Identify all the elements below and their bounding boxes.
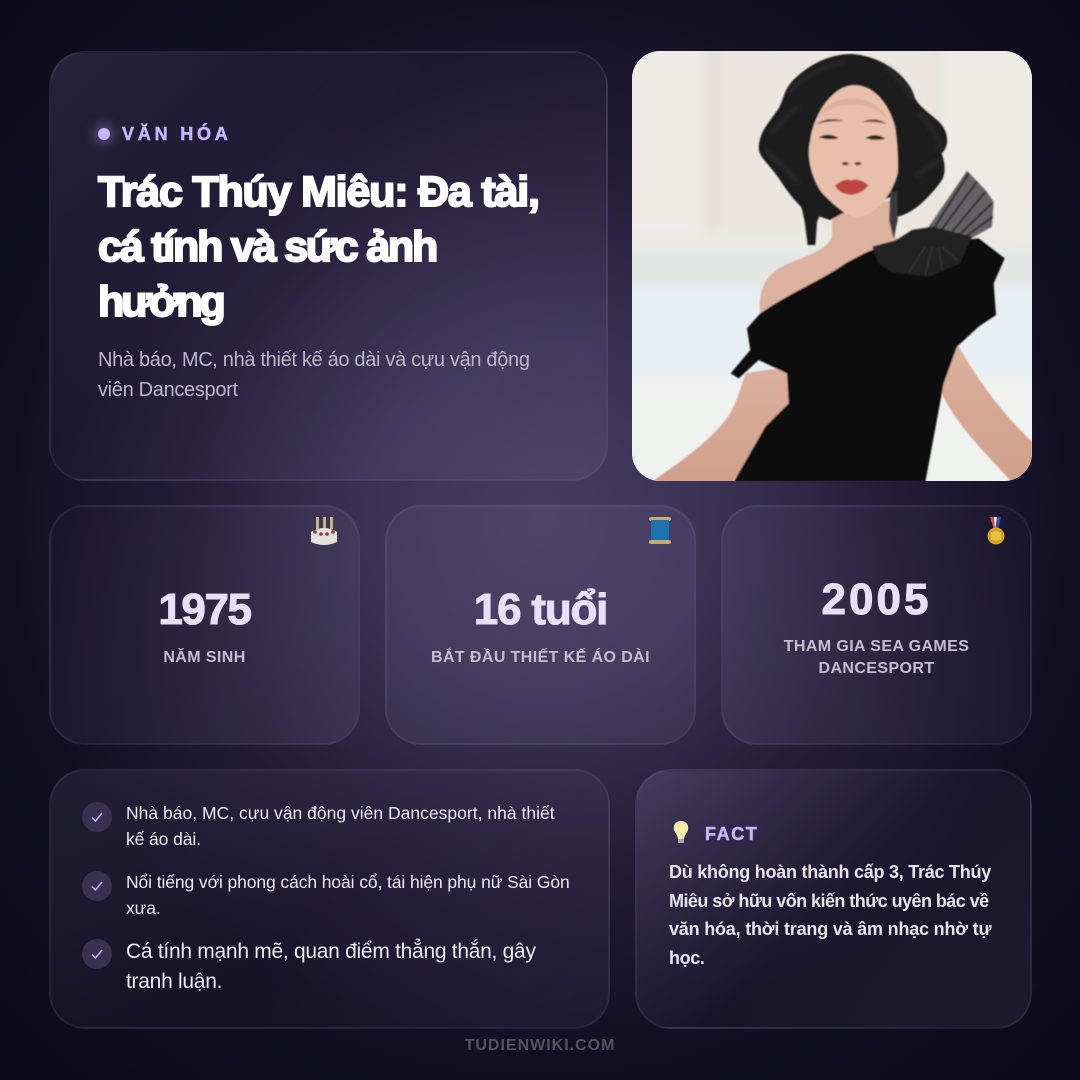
stat label: NĂM SINH [163,649,246,666]
panel: bullet list [49,769,610,1029]
fact text: học. [669,948,704,968]
earrings [800,202,822,245]
bullet text 2: Nổi tiếng với phong cách hoài cổ, tái hiện phụ nữ Sài Gòn [126,872,570,892]
fact text: Dù không hoàn thành cấp 3, Trác Thúy [669,862,991,882]
panel: stat 2005 [721,505,1032,745]
left arm [652,367,789,482]
stat value 1975: 1975 [158,585,251,634]
title [97,168,539,326]
eyes [819,135,885,140]
title: cá tính và sức ảnh [98,223,436,271]
bullet text 1: Nhà báo, MC, cựu vận động viên Dancesport, nhà thiết [126,803,555,823]
stat label: THAM GIA SEA GAMES [784,638,969,655]
fact text [669,862,992,968]
hair [759,54,947,220]
right arm [940,343,1032,482]
title: hưởng [98,278,223,326]
subtitle: Nhà báo, MC, nhà thiết kế áo dài và cựu vận động [98,349,530,371]
panel: stat 1975 [49,505,360,745]
category label: VĂN HÓA [122,124,232,144]
icon: cake [311,517,337,545]
forehead shade [821,98,885,116]
rosette [873,227,972,277]
bullet text 3: Cá tính mạnh mẽ, quan điểm thẳng thắn, gây [126,940,536,963]
icon: spool [649,517,671,544]
bullet check 3 [82,939,112,969]
bullet text 3: tranh luận. [126,970,222,993]
panel: photo [632,51,1032,481]
stat label: BẮT ĐẦU THIẾT KẾ ÁO DÀI [431,649,650,666]
bullet text 3 [126,938,536,993]
bullet check 1 [82,802,112,832]
stat label: DANCESPORT [818,660,934,677]
lips [835,179,868,195]
neck and chest [760,200,909,317]
bullet text 1 [126,803,555,849]
fact text: văn hóa, thời trang và âm nhạc nhờ tự [669,919,991,939]
panel: hero [49,51,608,481]
stat value 16 tuoi: 16 tuổi [474,585,607,634]
footer source: TUDIENWIKI.COM [465,1037,615,1054]
face [808,85,898,217]
tulle fan [928,170,995,238]
nose [842,162,849,165]
title: Trác Thúy Miêu: Đa tài, [98,168,539,216]
bullet text 2: xưa. [126,898,161,918]
fact text: Miêu sở hữu vốn kiến thức uyên bác về [669,891,989,911]
category dot [98,128,110,140]
bullet text 1: kế áo dài. [126,829,201,849]
eyebrows [816,119,887,124]
dress [731,238,1005,482]
icon: light bulb [674,821,688,843]
subtitle [98,349,530,401]
panel: stat 16 tuoi [385,505,696,745]
hair highlights [765,62,941,183]
panel: fact [635,769,1032,1029]
subtitle: viên Dancesport [98,379,238,401]
bullet text 2 [126,872,570,918]
stat value 2005: 2005 [822,575,931,624]
bullet check 2 [82,871,112,901]
icon: medal [988,517,1004,544]
stat label [784,638,969,677]
fact heading: FACT [705,824,758,844]
